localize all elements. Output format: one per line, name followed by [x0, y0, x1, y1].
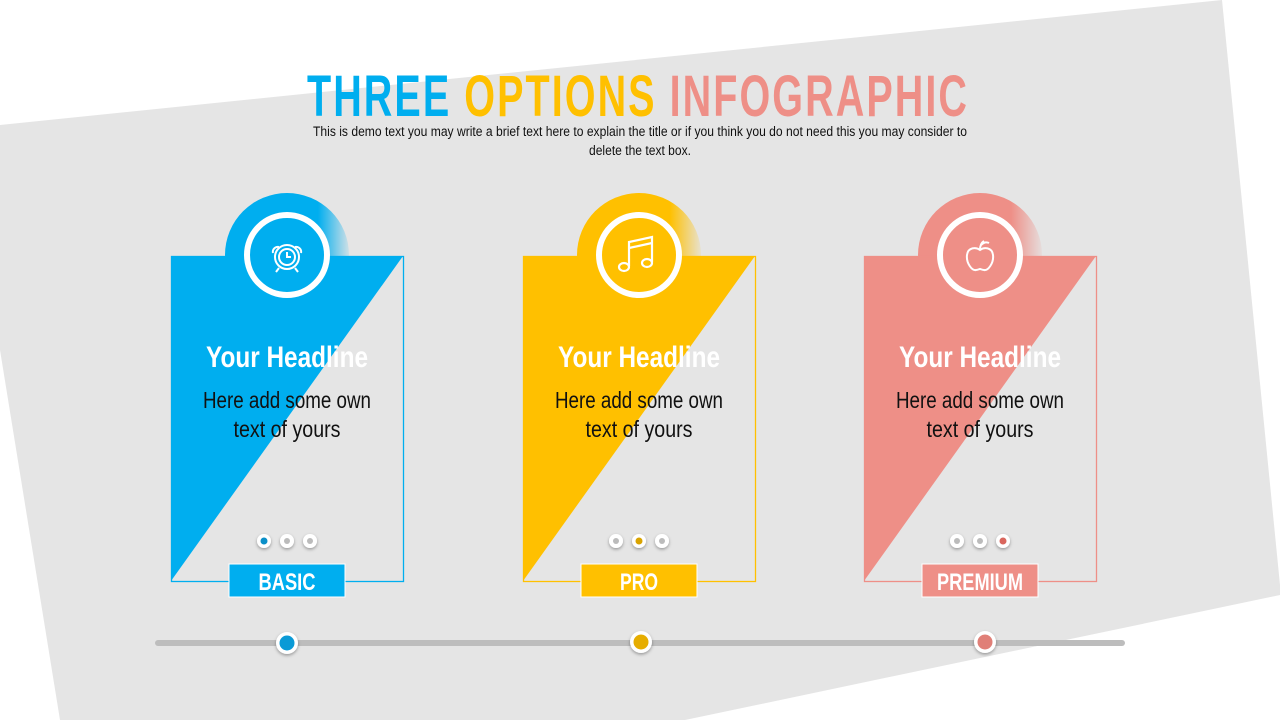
icon: alarm clock	[247, 215, 327, 295]
label: PREMIUM: PREMIUM	[937, 569, 1023, 596]
body text	[555, 387, 723, 442]
slider track	[158, 640, 1122, 646]
dots	[257, 534, 317, 548]
card: premium	[864, 193, 1096, 597]
subtitle text	[313, 124, 967, 158]
subtitle text: This is demo text you may write a brief text here to explain the title or if you think you do not need this you may consider to	[313, 124, 967, 139]
label: BASIC: BASIC	[258, 569, 316, 596]
label: PREMIUM	[922, 564, 1038, 597]
card: pro	[523, 193, 756, 597]
body text: text of yours	[234, 416, 340, 442]
label: PRO	[581, 564, 697, 597]
slider knobs	[276, 631, 996, 654]
icon: apple	[940, 215, 1020, 295]
card: basic	[171, 193, 404, 597]
body text: Here add some own	[203, 387, 371, 413]
icon: music note	[599, 215, 679, 295]
headline: Your Headline	[206, 341, 368, 374]
body text: Here add some own	[896, 387, 1064, 413]
dots	[609, 534, 669, 548]
body text	[203, 387, 371, 442]
body text: text of yours	[586, 416, 692, 442]
label: BASIC	[229, 564, 345, 597]
body text: text of yours	[926, 416, 1034, 442]
body text: Here add some own	[555, 387, 723, 413]
title: THREE OPTIONS INFOGRAPHIC	[307, 64, 969, 129]
label: PRO: PRO	[620, 569, 658, 596]
subtitle text: delete the text box.	[589, 143, 691, 158]
body text	[896, 387, 1064, 442]
dots	[950, 534, 1010, 548]
headline: Your Headline	[899, 341, 1061, 374]
headline: Your Headline	[558, 341, 720, 374]
